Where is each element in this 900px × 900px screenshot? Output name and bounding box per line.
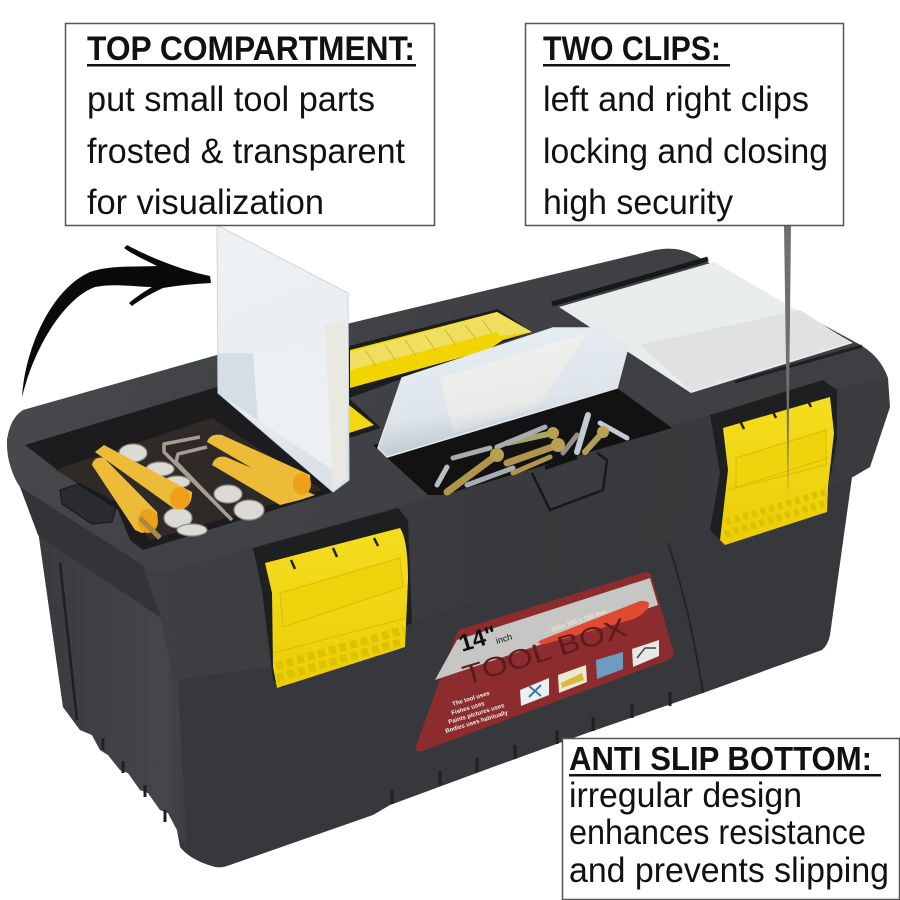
sticker size pill	[538, 601, 649, 644]
sticker size heading: 14"	[456, 621, 500, 658]
screw in plug	[140, 518, 160, 538]
right compartment slot	[552, 259, 708, 304]
callout: two clips	[526, 24, 844, 226]
handle recess	[349, 309, 532, 398]
right compartment frosted band	[640, 310, 850, 391]
left face recess seam	[60, 563, 77, 720]
upright clear lid	[217, 225, 349, 492]
sticker icon tiles	[520, 640, 659, 706]
centre latch	[532, 453, 607, 510]
lid front band	[143, 378, 890, 680]
two clips text line 1: left and right clips	[543, 80, 809, 119]
callout: top compartment	[66, 24, 434, 226]
left tray	[25, 387, 333, 550]
metal discs	[119, 444, 264, 536]
sticker uses list: Paints pictures uses	[448, 703, 506, 726]
screws	[437, 415, 627, 492]
anti slip text line 2: enhances resistance	[569, 813, 866, 852]
tool box	[7, 225, 890, 867]
lower handle yellow	[349, 405, 374, 433]
sticker uses list	[445, 691, 509, 735]
right yellow clip	[710, 380, 837, 545]
two clips heading: TWO CLIPS:	[543, 30, 721, 68]
handle grip top	[350, 312, 532, 370]
top compartment text line 2: frosted & transparent	[87, 132, 405, 171]
left face shade	[38, 530, 187, 850]
right face seam	[668, 543, 703, 693]
yellow wall plugs	[92, 435, 315, 533]
hex keys	[164, 437, 232, 520]
two clips text line 2: locking and closing	[543, 132, 828, 171]
sticker inch label: inch	[495, 632, 513, 646]
callout pointer line	[784, 225, 791, 498]
right clear compartment	[559, 262, 853, 393]
callout: anti slip bottom	[562, 738, 900, 900]
anti slip text line 1: irregular design	[569, 776, 802, 815]
sticker grey band	[435, 578, 658, 680]
left tray floor	[55, 418, 322, 540]
sticker pill text: 356x 180 x 150 mm	[550, 608, 608, 634]
lid left side band	[7, 438, 167, 622]
sticker red base	[416, 572, 673, 751]
lower handle recess	[349, 398, 381, 438]
box lower body silhouette	[38, 470, 853, 867]
centre tray	[373, 388, 672, 495]
left yellow clip	[253, 508, 412, 688]
lid top surface	[7, 249, 888, 572]
sticker tool box text: TOOL BOX	[459, 612, 630, 691]
anti slip text line 3: and prevents slipping	[569, 851, 889, 890]
left tray latch	[60, 484, 116, 524]
top compartment text line 3: for visualization	[87, 183, 324, 222]
handle grip segments	[365, 320, 492, 366]
plug ends	[138, 473, 311, 533]
yellow handle	[350, 312, 532, 388]
anti slip heading: ANTI SLIP BOTTOM:	[569, 740, 872, 777]
screw heads	[490, 426, 609, 462]
two clips text line 3: high security	[543, 183, 733, 222]
product sticker	[416, 572, 673, 751]
sticker uses list: Bodies uses habitually	[445, 710, 509, 735]
sticker uses list: Fishes uses	[451, 701, 486, 717]
curved arrow	[22, 245, 211, 397]
right compartment back line	[735, 346, 862, 382]
bottom ribs	[103, 692, 670, 822]
sticker uses list: The tool uses	[452, 691, 491, 708]
centre clear lid	[378, 328, 628, 457]
top compartment heading: TOP COMPARTMENT:	[87, 30, 415, 68]
top compartment text line 1: put small tool parts	[87, 80, 375, 119]
